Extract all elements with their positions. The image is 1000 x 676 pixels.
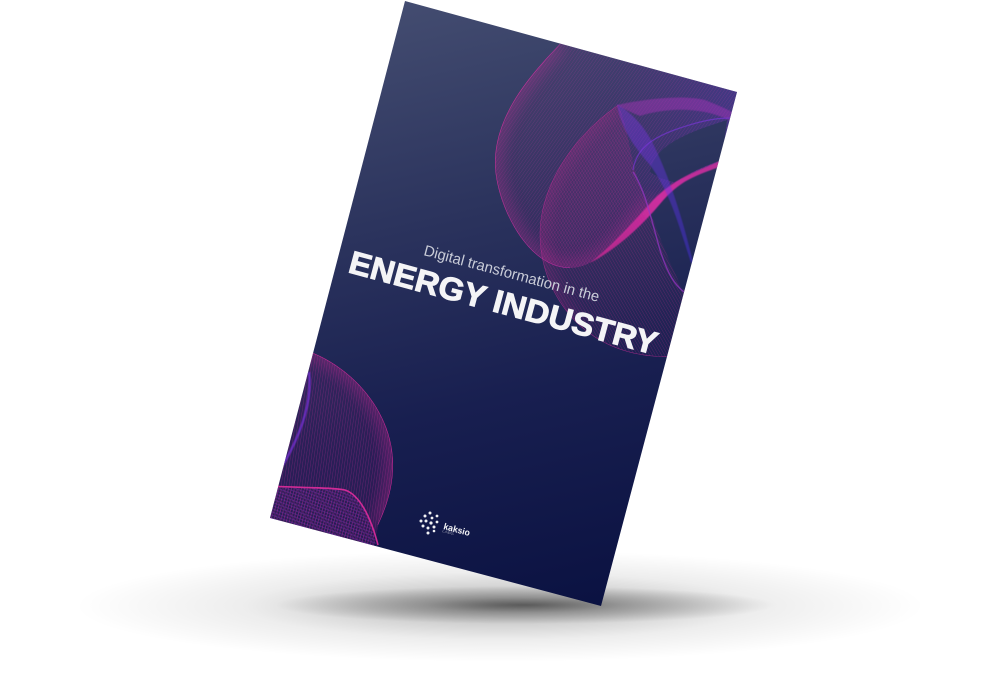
wave: lower dense band	[270, 488, 377, 546]
title: ENERGY INDUSTRY	[345, 244, 662, 362]
subtitle: Digital transformation in the	[422, 242, 601, 306]
ribbon: violet side strand	[633, 172, 684, 292]
icon: kaksio dots	[420, 512, 438, 534]
ground shadow	[75, 550, 925, 662]
top-right wave pattern	[495, 44, 737, 357]
ribbon: violet arc lower edge	[633, 118, 730, 170]
logo sub-label: LABS	[442, 529, 455, 536]
logo	[420, 512, 472, 538]
wave: lower oval	[540, 105, 684, 357]
ribbon: blue violet	[617, 104, 693, 263]
logo wordmark: kaksio	[442, 521, 472, 538]
wave: large pink blob	[495, 44, 737, 268]
bottom-left wave pattern	[270, 353, 393, 546]
infographic: booklet mockup	[156, 1, 844, 652]
wave: bright pink line	[265, 486, 378, 545]
booklet cover	[260, 1, 760, 606]
wave: violet left strand	[283, 372, 310, 465]
ribbon: magenta arc	[617, 97, 732, 120]
ribbon: bright pink	[590, 160, 722, 263]
wave: circular arc	[270, 353, 393, 546]
